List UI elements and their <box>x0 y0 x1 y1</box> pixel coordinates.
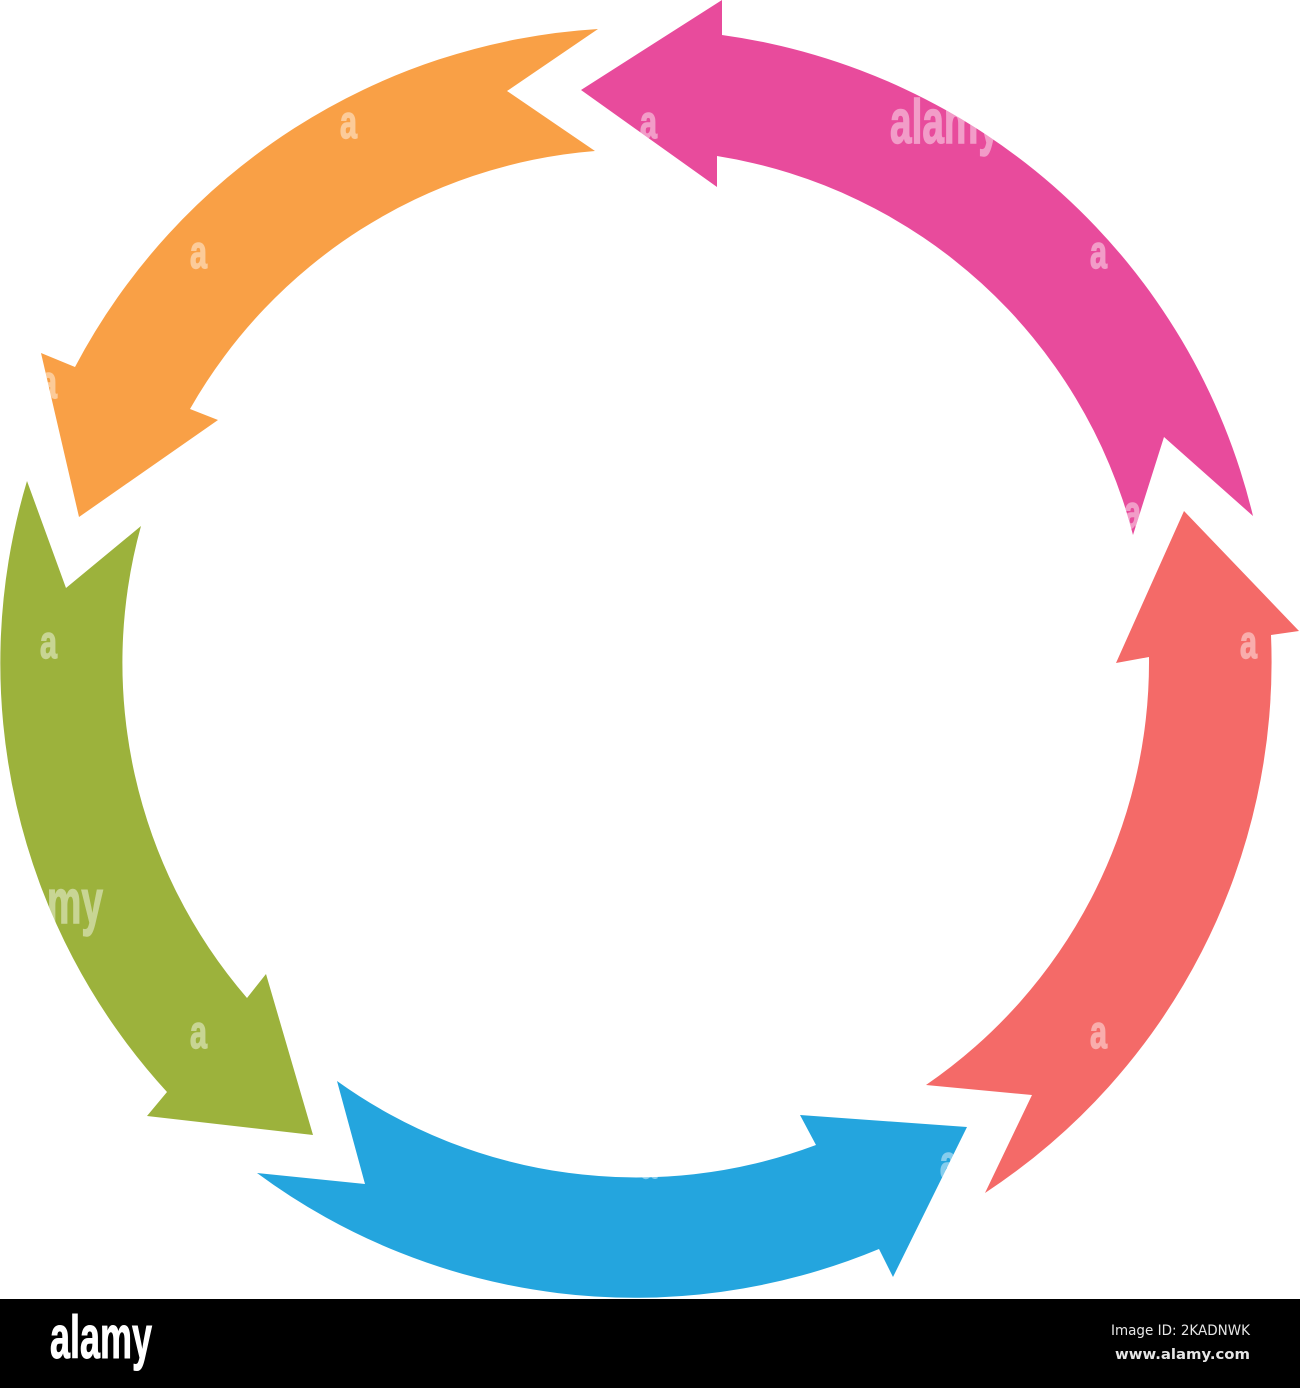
arrow: orange <box>41 29 598 517</box>
arrow: pink <box>581 0 1253 535</box>
watermark letters <box>0 88 1257 1188</box>
footer logo: alamy <box>50 1304 152 1371</box>
arrow: blue <box>257 1081 967 1298</box>
watermark letters: a <box>1090 226 1107 278</box>
arrow: green <box>0 481 313 1135</box>
watermark letters: a <box>190 1006 207 1058</box>
watermark letters: a <box>190 226 207 278</box>
footer bar <box>0 1299 1300 1388</box>
watermark letters: alamy <box>890 88 1000 157</box>
watermark letters: a <box>1240 616 1257 668</box>
watermark letters: a <box>640 96 657 148</box>
watermark letters: a <box>1124 486 1141 538</box>
watermark letters: a <box>1090 1006 1107 1058</box>
footer image ID: Image ID: 2KADNWK <box>1111 1323 1251 1339</box>
arrow: coral red <box>926 511 1299 1193</box>
watermark letters: a <box>940 1136 957 1188</box>
watermark letters: a <box>640 1136 657 1188</box>
watermark letters: a <box>340 96 357 148</box>
watermark letters: a <box>40 616 57 668</box>
watermark letters: a <box>40 356 57 408</box>
footer website: www.alamy.com <box>1115 1347 1250 1363</box>
